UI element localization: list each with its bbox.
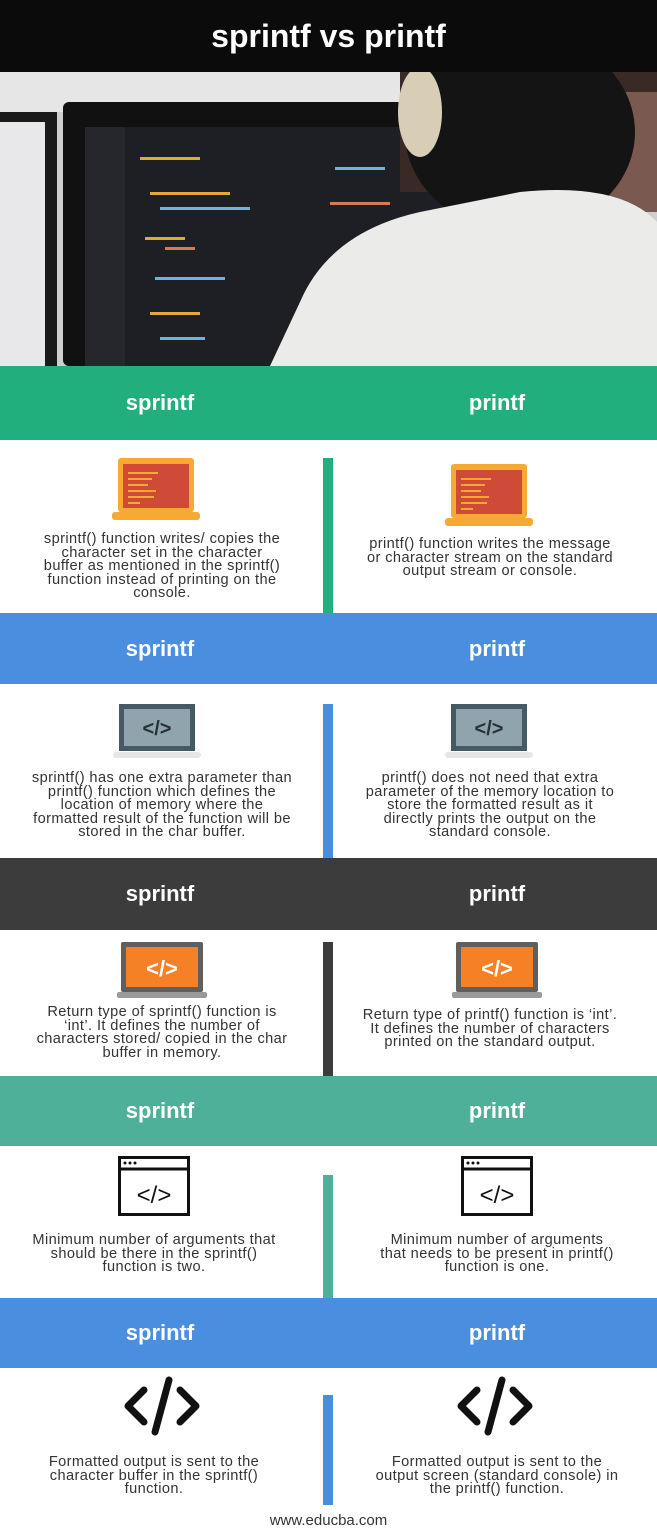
icon: orange code laptop right — [452, 942, 542, 998]
text left: Return type of sprintf() function is — [47, 1004, 277, 1020]
text left — [32, 1232, 276, 1275]
icon: browser code left: </> — [137, 1182, 171, 1209]
icon: browser code right: </> — [480, 1182, 514, 1209]
icon: orange code laptop left — [117, 942, 207, 998]
text right: that needs to be present in printf() — [380, 1246, 614, 1262]
header 2: printf — [469, 636, 525, 660]
icon: browser code right — [461, 1156, 533, 1216]
panel 4 — [32, 1156, 614, 1298]
text left: location of memory where the — [61, 797, 263, 813]
header 4: printf — [469, 1098, 525, 1123]
panel 5 — [49, 1376, 618, 1529]
icon: orange code laptop right: </> — [481, 956, 513, 981]
divider teal — [323, 1175, 333, 1298]
header 4 — [0, 1076, 657, 1146]
panel 2 — [32, 704, 614, 858]
text right: parameter of the memory location to — [366, 784, 614, 800]
icon: orange laptop right — [445, 464, 533, 526]
text left: console. — [133, 585, 191, 601]
text left — [49, 1454, 259, 1497]
title: sprintf vs printf — [211, 18, 446, 54]
text left: Formatted output is sent to the — [49, 1454, 259, 1470]
text right: output stream or console. — [403, 563, 577, 579]
text right: standard console. — [429, 824, 551, 840]
text left: sprintf() function writes/ copies the — [44, 531, 280, 547]
header 5 — [0, 1298, 657, 1368]
text right — [363, 1007, 617, 1050]
footer: www.educba.com — [270, 1512, 387, 1529]
text left: sprintf() has one extra parameter than — [32, 770, 292, 786]
text right: output screen (standard console) in — [376, 1468, 618, 1484]
text right: Minimum number of arguments — [391, 1232, 603, 1248]
text right — [367, 536, 613, 579]
text right — [366, 770, 614, 840]
text left: printf() function which defines the — [48, 784, 276, 800]
divider blue — [323, 1395, 333, 1505]
text left: Minimum number of arguments that — [32, 1232, 276, 1248]
text left: function. — [125, 1481, 183, 1497]
icon: code laptop left — [113, 704, 201, 758]
icon: code laptop left: </> — [143, 718, 171, 740]
header 2 — [0, 613, 657, 684]
text left — [37, 1004, 287, 1061]
header 5: printf — [469, 1320, 525, 1345]
text right: printf() function writes the message — [369, 536, 611, 552]
text right: It defines the number of characters — [370, 1021, 610, 1037]
icon: orange code laptop left: </> — [146, 956, 178, 981]
panel 1 — [44, 458, 613, 613]
header 3: printf — [469, 881, 525, 906]
divider dark — [323, 942, 333, 1076]
header 4: sprintf — [126, 1098, 194, 1123]
icon: code laptop right: </> — [475, 718, 503, 740]
text right — [380, 1232, 614, 1275]
panel 3 — [37, 942, 617, 1076]
header 3: sprintf — [126, 881, 194, 906]
icon: browser code left — [118, 1156, 190, 1216]
text right: the printf() function. — [430, 1481, 564, 1497]
icon: code brackets right — [458, 1376, 532, 1436]
divider green — [323, 458, 333, 613]
text right — [376, 1454, 618, 1497]
header 1: sprintf — [126, 390, 194, 415]
header 2: sprintf — [126, 636, 194, 660]
header 5: sprintf — [126, 1320, 194, 1345]
text right: store the formatted result as it — [387, 797, 593, 813]
header 3 — [0, 858, 657, 930]
text right: or character stream on the standard — [367, 550, 613, 566]
photo: programmer at monitor — [0, 72, 657, 366]
text right: printf() does not need that extra — [382, 770, 598, 786]
text left: stored in the char buffer. — [78, 824, 246, 840]
text left: ‘int’. It defines the number of — [64, 1018, 260, 1034]
icon: code brackets left — [124, 1376, 200, 1436]
text left: character buffer in the sprintf() — [50, 1468, 258, 1484]
text left: buffer in memory. — [102, 1045, 221, 1061]
text left: formatted result of the function will be — [33, 811, 291, 827]
title — [0, 0, 657, 72]
header 1: printf — [469, 390, 525, 415]
divider blue — [323, 704, 333, 858]
text left — [44, 531, 280, 601]
text left: function is two. — [103, 1259, 205, 1275]
text left: characters stored/ copied in the char — [37, 1031, 287, 1047]
icon: orange laptop left — [112, 458, 200, 520]
text left: function instead of printing on the — [47, 572, 276, 588]
icon: code laptop right — [445, 704, 533, 758]
text right: Return type of printf() function is ‘int’. — [363, 1007, 617, 1023]
text right: printed on the standard output. — [384, 1034, 596, 1050]
text left: buffer as mentioned in the sprintf() — [44, 558, 280, 574]
text right: directly prints the output on the — [384, 811, 596, 827]
header 1 — [0, 366, 657, 440]
text right: Formatted output is sent to the — [392, 1454, 602, 1470]
text left: character set in the character — [62, 545, 262, 561]
text right: function is one. — [445, 1259, 549, 1275]
text left — [32, 770, 292, 840]
text left: should be there in the sprintf() — [51, 1246, 257, 1262]
